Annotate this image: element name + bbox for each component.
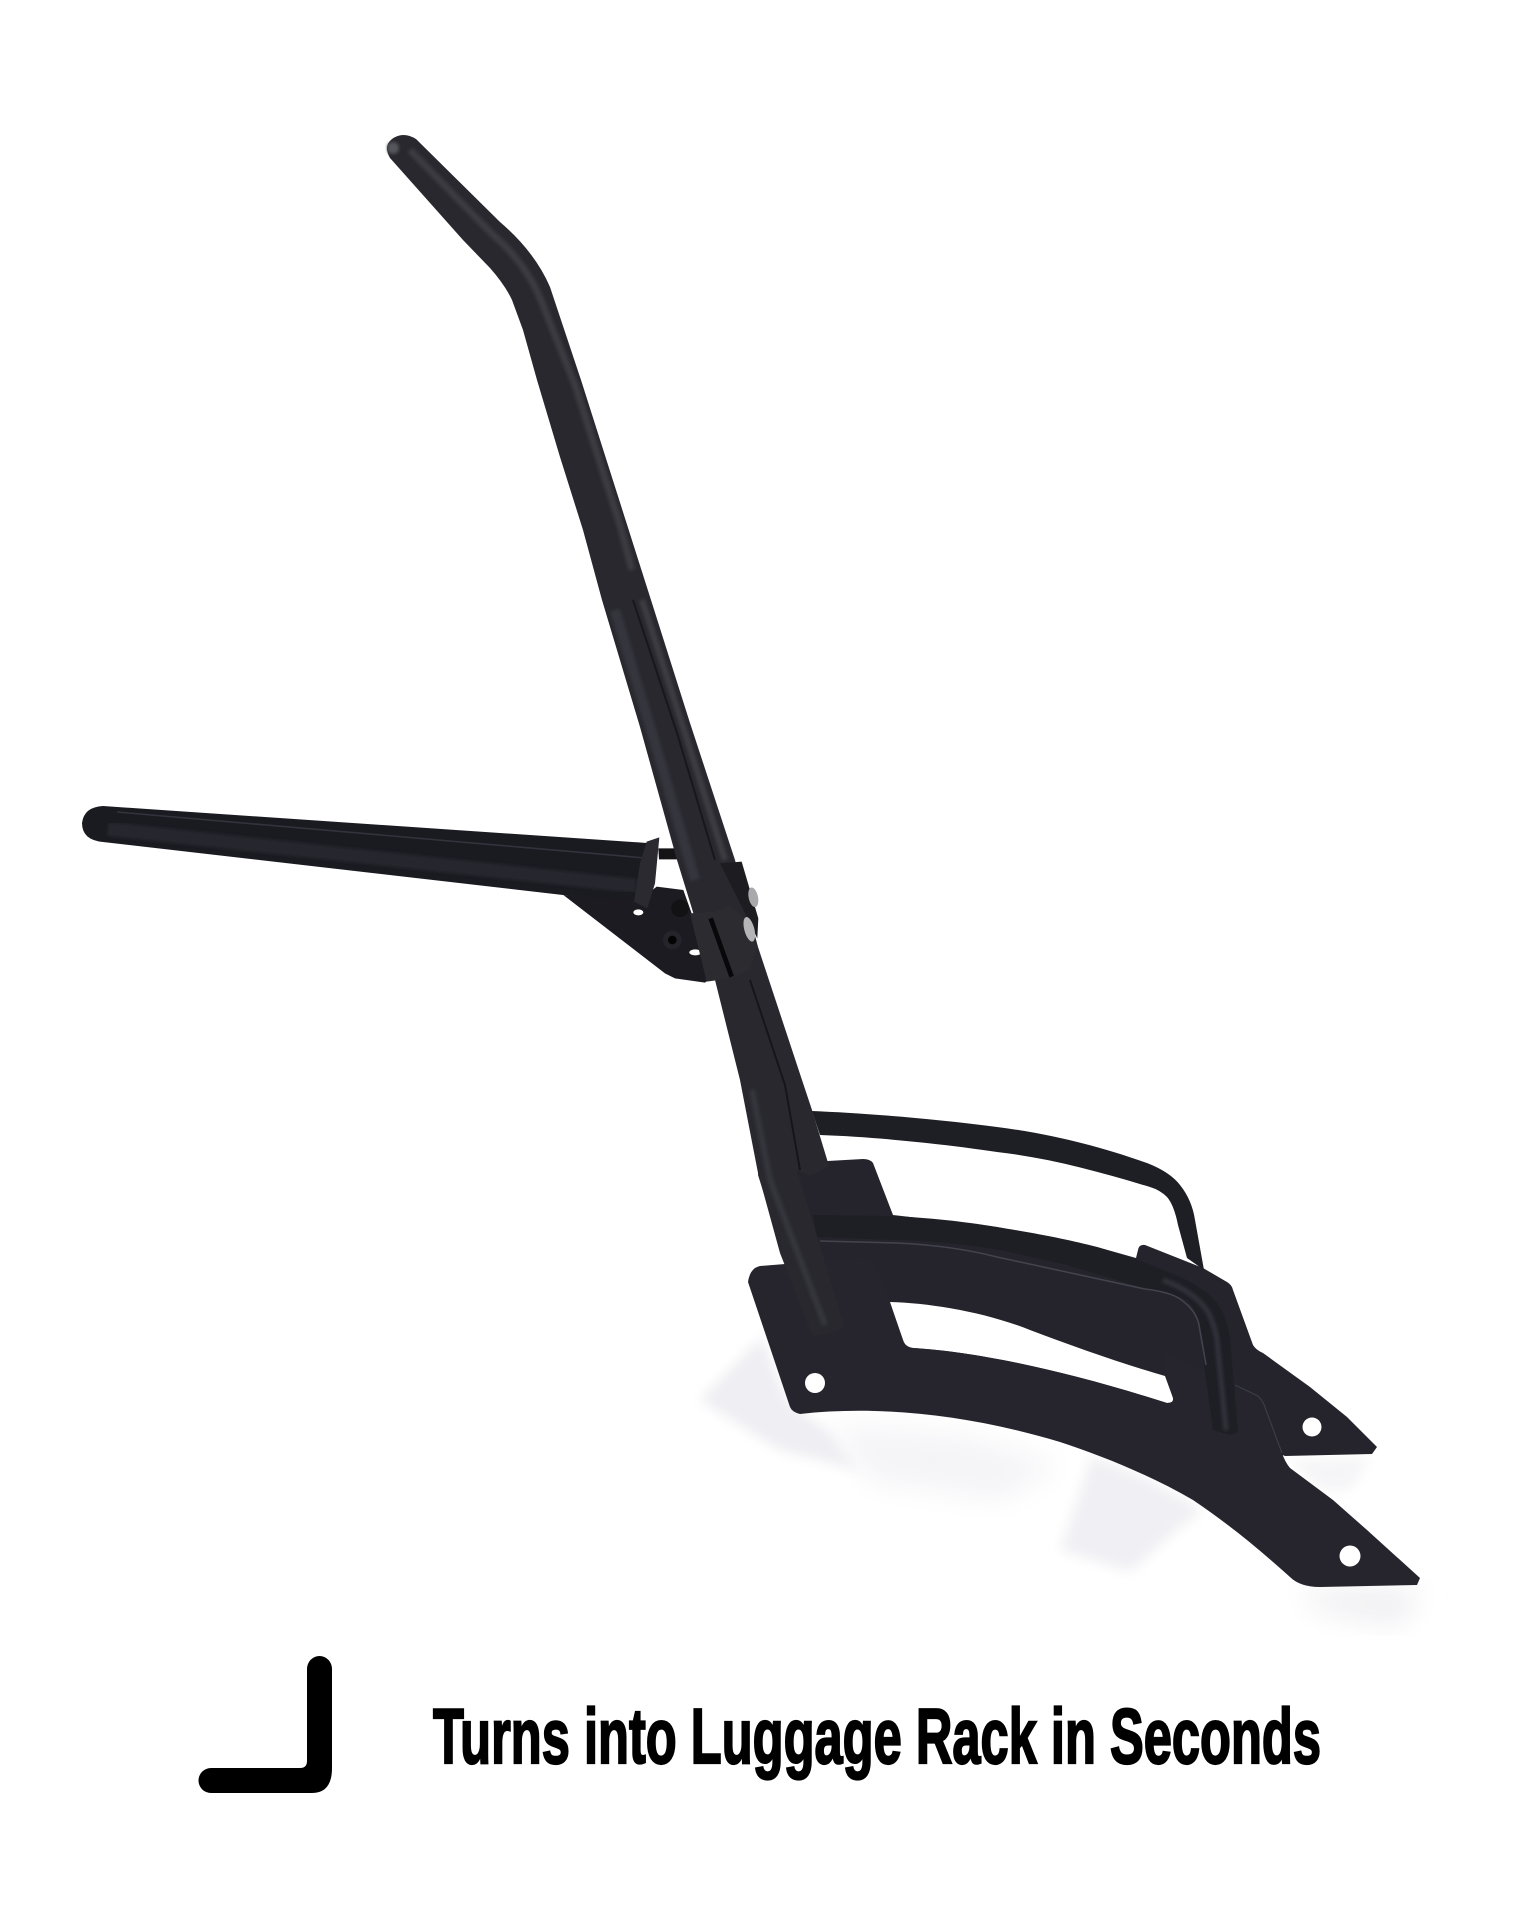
link rod bbox=[658, 848, 679, 859]
silver bolt lower bbox=[741, 916, 757, 943]
main tube pair full length bbox=[387, 135, 844, 1336]
horizontal luggage arm bbox=[82, 806, 647, 902]
upper rear rail loop bbox=[812, 1111, 1204, 1270]
floor shadows under the rack bbox=[700, 1337, 1420, 1625]
front plate hole right bbox=[1340, 1546, 1360, 1566]
front plate hole left bbox=[805, 1373, 825, 1393]
front mounting plate bbox=[748, 1258, 1420, 1587]
tube tip highlight bbox=[387, 142, 399, 154]
window between plates bbox=[890, 1302, 1173, 1403]
lower front rail loop bbox=[813, 1215, 1238, 1435]
arm end bracket bbox=[634, 837, 659, 908]
icon: L-shaped rack silhouette bbox=[198, 1656, 332, 1793]
arm mounting bracket and hinge detail bbox=[563, 837, 708, 983]
hinge clamp with bolts bbox=[690, 862, 760, 982]
hinge clamp sleeve bbox=[690, 905, 757, 982]
rear mounting plate bbox=[758, 1159, 1377, 1456]
tube highlight bbox=[410, 150, 632, 570]
triangular plate bbox=[563, 887, 708, 983]
rear hinge clamp bbox=[720, 862, 758, 938]
front plate edge highlight bbox=[1235, 1385, 1282, 1453]
silver bolt upper bbox=[747, 887, 760, 908]
rear plate mounting hole bbox=[1302, 1418, 1322, 1436]
